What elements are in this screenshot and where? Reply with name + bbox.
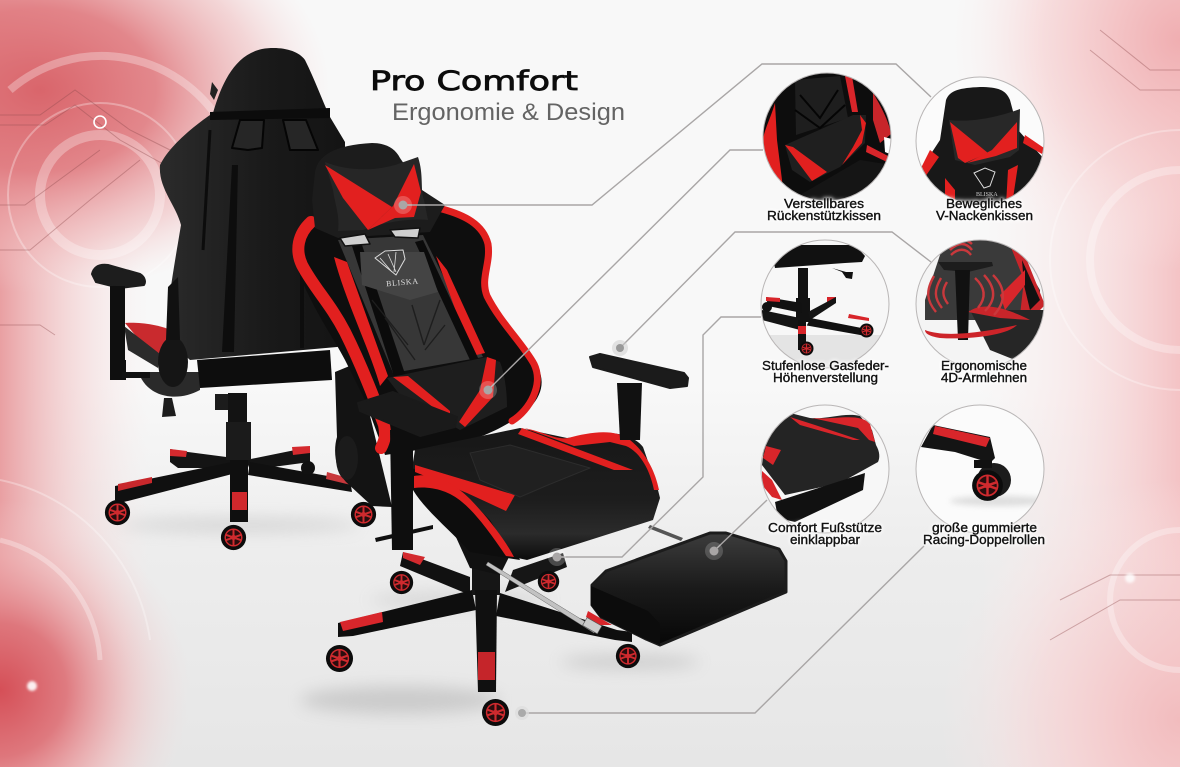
front armrest (358, 392, 457, 550)
front chair backrest (296, 207, 542, 455)
lumbar pillow (387, 357, 507, 430)
marker: armrest (612, 340, 628, 356)
rear chair base (115, 393, 352, 522)
label: Verstellbares Rückenstützkissen: Rückenstützkissen (767, 208, 881, 223)
detail circle: double wheel (916, 405, 1050, 533)
detail circle: neck pillow (916, 77, 1045, 205)
neck pillow (325, 157, 428, 231)
label: Ergonomische 4D-Armlehnen: Ergonomische (941, 358, 1027, 373)
backrest center panel (334, 235, 485, 386)
detail circle: footrest (761, 405, 889, 533)
front chair wheels (326, 571, 640, 726)
rear chair wheels (105, 461, 376, 550)
label: Comfort Fußstütze einklappbar: Comfort Fußstütze (768, 520, 882, 535)
rear chair strap and openings (158, 82, 332, 388)
headrest frame (312, 143, 445, 238)
feature labels (762, 196, 1045, 547)
title: Pro Comfort: Pro Comfort (370, 66, 578, 97)
label: große gummierte Racing-Doppelrollen (923, 520, 1045, 547)
label: Comfort Fußstütze einklappbar: einklappbar (790, 532, 861, 547)
label: Ergonomische 4D-Armlehnen: 4D-Armlehnen (941, 370, 1027, 385)
rear chair backrest (160, 48, 345, 360)
marker: wheel (515, 706, 529, 720)
label: Bewegliches V-Nackenkissen (936, 196, 1033, 223)
detail circle: 4D armrest (916, 240, 1045, 368)
label: Comfort Fußstütze einklappbar (768, 520, 882, 547)
marker: footrest (705, 542, 723, 560)
detail circle: neck pillow: BLISKA (976, 192, 998, 198)
seat (412, 428, 660, 560)
label: Verstellbares Rückenstützkissen: Verstellbares (784, 196, 865, 211)
label: Stufenlose Gasfeder-Höhenverstellung: Höhenverstellung (773, 370, 878, 385)
front chair tilt mechanism (335, 365, 392, 507)
leader lines and markers (394, 64, 931, 720)
label: Stufenlose Gasfeder-Höhenverstellung: Stufenlose Gasfeder- (762, 358, 889, 373)
logo: BLISKA (375, 250, 419, 288)
far armrest (590, 354, 688, 440)
label: Ergonomische 4D-Armlehnen (941, 358, 1027, 385)
label: Stufenlose Gasfeder-Höhenverstellung (762, 358, 889, 385)
label: große gummierte Racing-Doppelrollen: Racing-Doppelrollen (923, 532, 1045, 547)
label: Bewegliches V-Nackenkissen: Bewegliches (946, 196, 1023, 211)
chrome footrest rods (486, 525, 683, 634)
chair: rear view (92, 48, 376, 550)
detail circle: lumbar pillow (763, 73, 892, 205)
front chair base (338, 525, 632, 692)
footrest (591, 533, 786, 645)
logo: BLISKA: BLISKA (386, 277, 419, 288)
label: Bewegliches V-Nackenkissen: V-Nackenkissen (936, 208, 1033, 223)
subtitle: Ergonomie & Design: Ergonomie & Design (392, 99, 625, 126)
metal headrest brackets (340, 228, 420, 246)
chair: front view with footrest (296, 143, 786, 726)
label: große gummierte Racing-Doppelrollen: große gummierte (932, 520, 1037, 535)
marker: lumbar pillow (479, 381, 497, 399)
marker: neck pillow (394, 196, 412, 214)
rear chair armrest and seat (92, 265, 200, 397)
backrest red rims (298, 209, 537, 448)
marker: gas lift (548, 548, 566, 566)
label: Verstellbares Rückenstützkissen (767, 196, 881, 223)
detail circle: gas lift base (761, 240, 889, 375)
